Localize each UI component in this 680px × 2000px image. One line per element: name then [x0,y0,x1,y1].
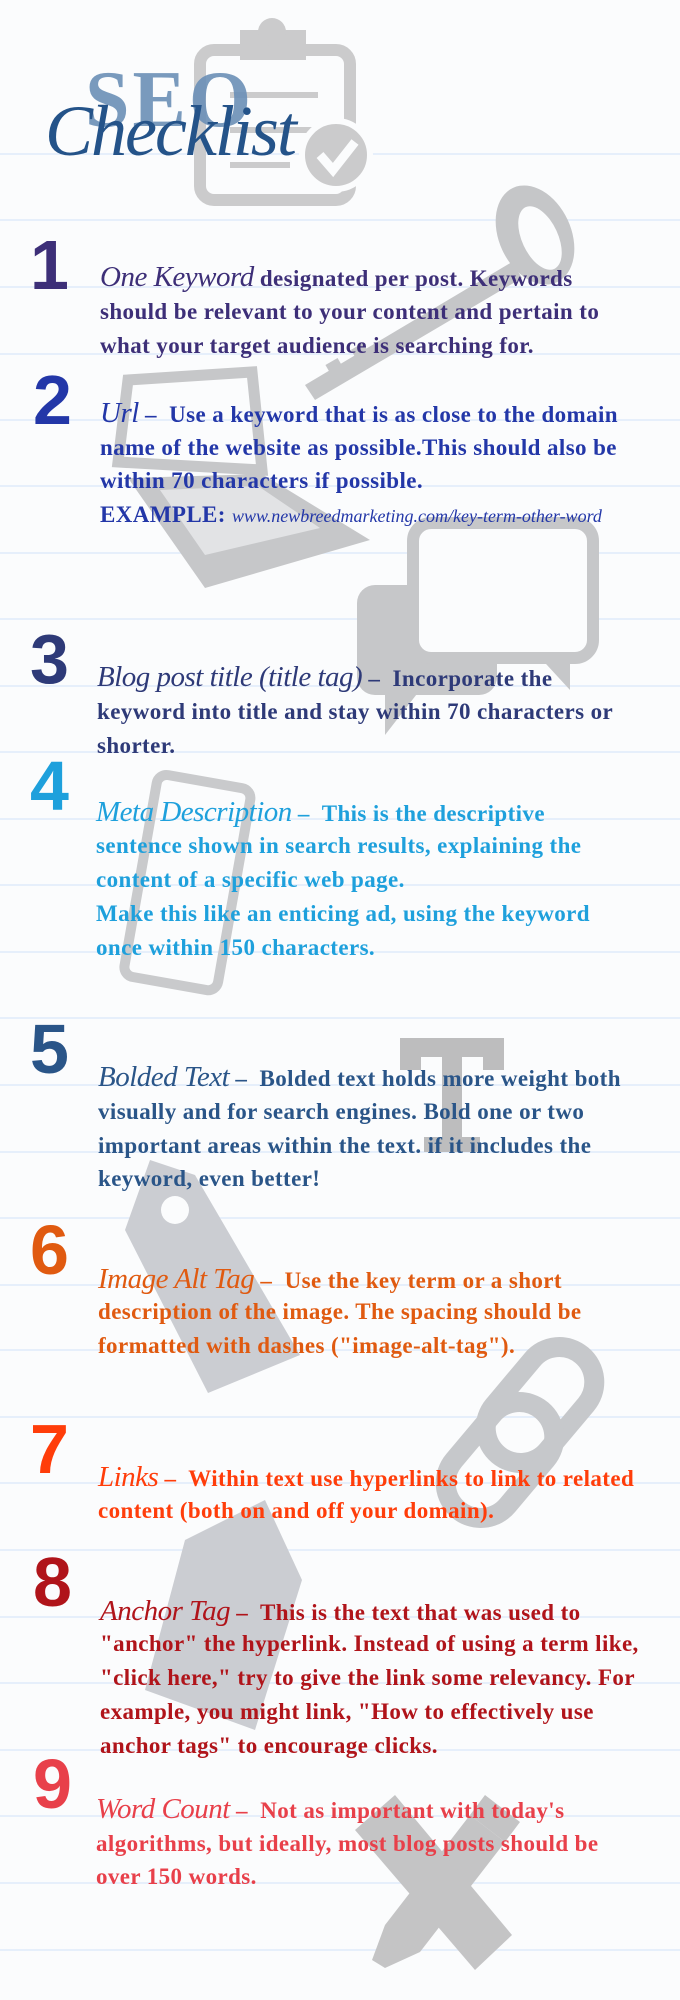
text: Bolded Text – Bolded text holds more weight both [98,1061,621,1093]
text: Links – Within text use hyperlinks to link to related [98,1461,634,1493]
text: Meta Description – This is the descriptive [96,796,545,828]
item 4 [30,747,590,960]
text: keyword, even better! [98,1166,320,1191]
text: formatted with dashes ("image-alt-tag"). [98,1333,515,1358]
text: algorithms, but ideally, most blog posts should be [96,1831,598,1856]
item 9 [33,1745,598,1889]
text: content (both on and off your domain). [98,1498,494,1523]
text: anchor tags" to encourage clicks. [100,1733,438,1758]
icon: tag 2 [145,1500,302,1730]
item 6 [30,1211,582,1358]
text: example, you might link, "How to effectively use [100,1699,594,1724]
icon: pencil and ruler [355,1795,520,1970]
text: visually and for search engines. Bold one or two [98,1099,584,1124]
text: 5 [30,1010,69,1088]
icon: key [305,173,590,400]
title [45,56,298,171]
text: Image Alt Tag – Use the key term or a short [98,1263,562,1295]
icon: link chain [431,1333,609,1532]
text: within 70 characters if possible. [100,468,423,493]
text: 1 [30,226,69,304]
text: Word Count – Not as important with today's [96,1793,564,1825]
item 1 [30,226,599,358]
text: EXAMPLE: www.newbreedmarketing.com/key-term-other-word [100,502,602,527]
text: keyword into title and stay within 70 characters or [97,699,613,724]
icon: letter T [400,1038,504,1152]
text: should be relevant to your content and pertain to [100,299,599,324]
text: 6 [30,1211,69,1289]
item 8 [33,1543,639,1758]
item 3 [30,620,613,758]
icon: speech bubbles [357,523,593,735]
text: sentence shown in search results, explaining the [96,833,581,858]
text: 9 [33,1745,72,1823]
text: Url – Use a keyword that is as close to the domain [100,397,618,429]
text: what your target audience is searching for. [100,333,534,358]
text: 8 [33,1543,72,1621]
item 2 [33,361,618,527]
text: name of the website as possible.This should also be [100,435,617,460]
text: Blog post title (title tag) – Incorporate the [97,661,552,693]
text: over 150 words. [96,1864,257,1889]
text: 4 [30,747,69,825]
text: 2 [33,361,72,439]
text: One Keyword designated per post. Keywords [100,261,573,293]
text: Anchor Tag – This is the text that was used to [100,1595,581,1627]
text: 3 [30,620,69,698]
text: shorter. [97,733,175,758]
item 7 [30,1410,634,1523]
text: important areas within the text. if it includes the [98,1133,591,1158]
text: "anchor" the hyperlink. Instead of using a term like, [100,1631,639,1656]
icon: clipboard [200,18,370,200]
text: "click here," try to give the link some relevancy. For [100,1665,635,1690]
title: SEO: SEO [85,56,254,144]
icon: laptop [118,372,370,588]
text: description of the image. The spacing should be [98,1299,582,1324]
text: 7 [30,1410,69,1488]
text: Make this like an enticing ad, using the keyword [96,901,590,926]
text: once within 150 characters. [96,935,375,960]
icon: tablet [123,773,252,992]
icon: tag [125,1160,300,1393]
text: content of a specific web page. [96,867,405,892]
item 5 [30,1010,621,1191]
title: Checklist: Checklist [45,91,295,171]
